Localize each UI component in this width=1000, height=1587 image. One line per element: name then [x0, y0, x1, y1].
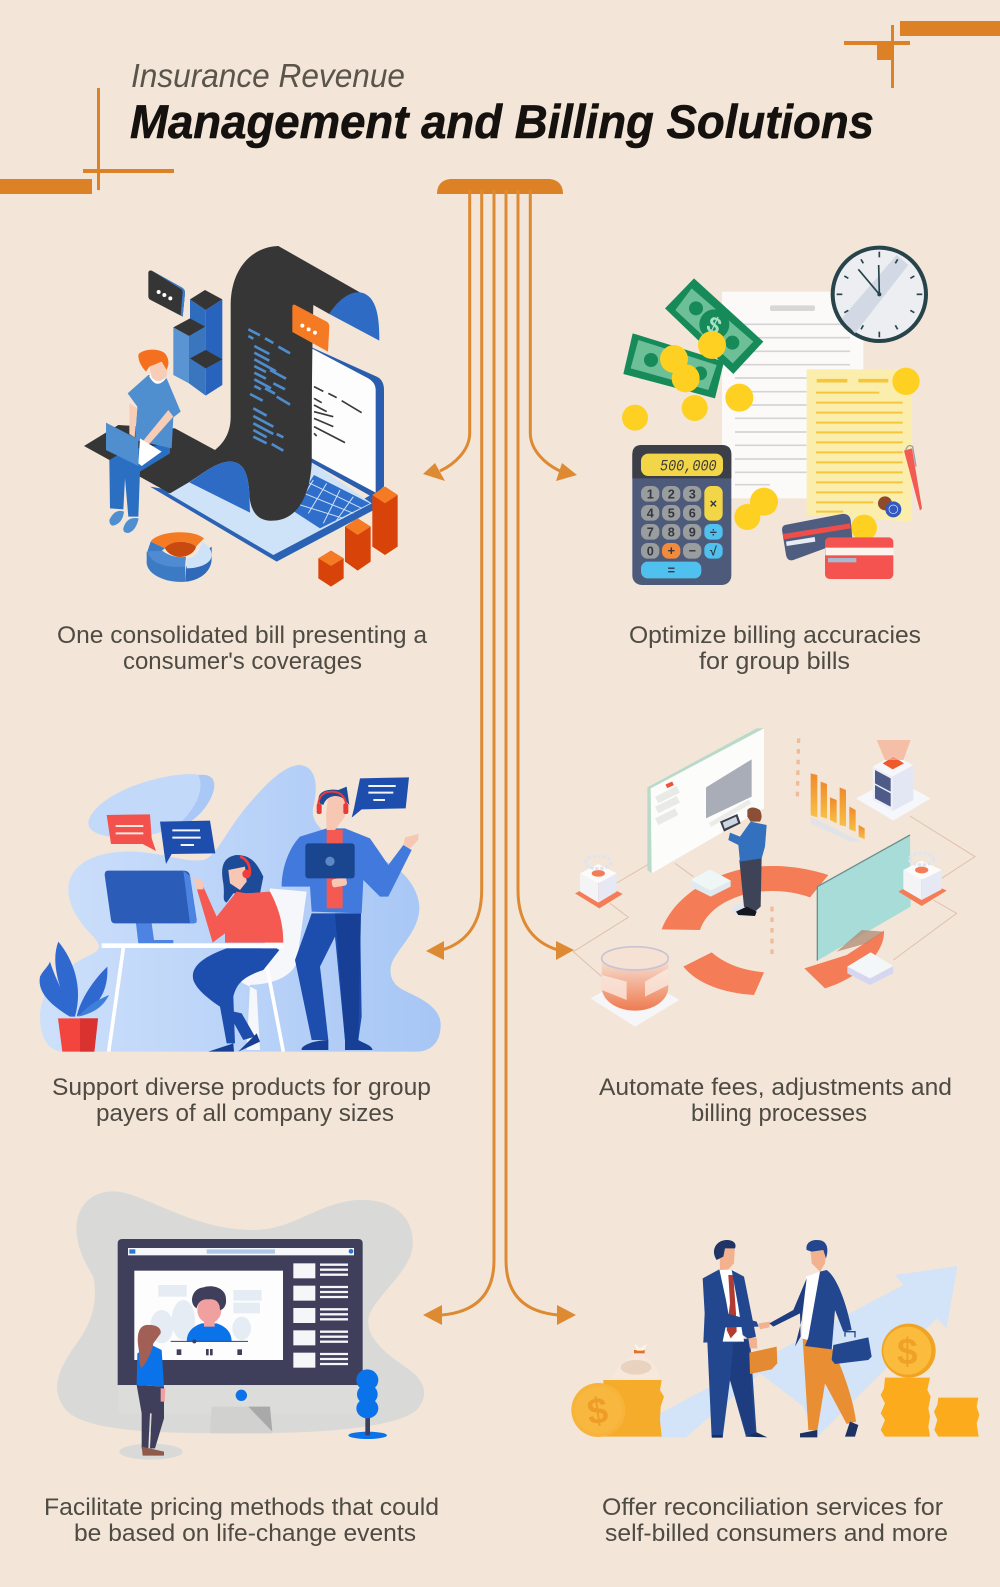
calculator display: 500,000	[660, 458, 717, 476]
caption: pricing methods	[44, 1494, 439, 1547]
woman viewer	[119, 1325, 183, 1460]
icon: orange chat bubble	[292, 305, 329, 352]
calculator keys: ÷	[710, 526, 717, 540]
caption: diverse products	[52, 1074, 431, 1127]
panel: reconciliation handshake illustration	[571, 1240, 979, 1438]
caption: automation	[599, 1074, 952, 1127]
caption: reconciliation: self-billed consumers and more	[605, 1520, 948, 1547]
icon: code printout	[84, 246, 379, 521]
subtitle: Insurance Revenue	[131, 57, 405, 94]
icon: blue blocks	[173, 290, 222, 396]
calculator keys	[641, 486, 723, 578]
coin stack with bag	[571, 1343, 664, 1437]
teal board	[817, 835, 911, 961]
decorative floating digits	[772, 738, 799, 960]
caption: reconciliation: Offer reconciliation services for	[602, 1494, 943, 1521]
glass cylinder on base	[591, 947, 679, 1027]
icon: yellow document	[807, 369, 912, 522]
person with laptop	[106, 350, 181, 533]
caption: pricing methods: Facilitate pricing methods that could	[44, 1494, 439, 1521]
calculator keys: 9	[689, 526, 696, 540]
caption: billing accuracy: Optimize billing accuracies	[629, 622, 921, 649]
businessman right	[769, 1240, 872, 1437]
top-right corner ornament	[844, 21, 1000, 88]
calculator keys: 1	[647, 488, 654, 502]
coin stack with bag: $	[585, 1389, 610, 1433]
isometric gear stack right	[898, 853, 947, 906]
icon: pen	[904, 446, 922, 511]
icon: coins	[622, 331, 920, 541]
icon: laptop	[150, 347, 384, 562]
calculator keys: =	[668, 564, 675, 578]
coin stacks right	[881, 1324, 979, 1437]
isometric routers	[691, 869, 893, 985]
man with tablet	[720, 807, 767, 917]
calculator keys: 0	[647, 545, 654, 559]
woman with headset	[193, 855, 283, 1052]
caption: diverse products: payers of all company sizes	[96, 1100, 394, 1127]
blue background blob	[40, 765, 441, 1052]
caption: consolidated bill: One consolidated bill presenting a	[57, 622, 427, 649]
panel: billing accuracy illustration	[622, 248, 926, 585]
calculator keys: +	[668, 544, 675, 558]
caption: billing accuracy: for group bills	[699, 648, 850, 675]
video player	[150, 1285, 262, 1355]
calculator keys: 7	[647, 526, 654, 540]
caption: automation: Automate fees, adjustments and	[599, 1074, 952, 1101]
caption: consolidated bill: consumer's coverages	[123, 648, 362, 675]
calculator keys: √	[710, 545, 717, 559]
caption: diverse products: Support diverse products for group	[52, 1074, 431, 1101]
connector network lines	[573, 816, 975, 977]
caption: automation: billing processes	[691, 1100, 867, 1127]
panel: video learning illustration	[57, 1191, 424, 1460]
isometric gear stack left	[575, 856, 623, 908]
icon: white invoice	[722, 292, 863, 498]
panel: support team illustration	[40, 765, 441, 1052]
connector cap	[437, 179, 563, 194]
calculator keys: −	[689, 544, 696, 558]
icon: tree	[348, 1369, 387, 1439]
grey blob	[57, 1191, 424, 1433]
calculator keys: 3	[689, 488, 696, 502]
icon: desktop monitor	[118, 1239, 363, 1433]
isometric server	[856, 740, 931, 821]
central connector with six arrows	[423, 179, 577, 1325]
caption: reconciliation	[602, 1494, 948, 1547]
icon: credit cards	[782, 514, 894, 579]
icon: orange bars	[318, 487, 398, 587]
main heading: Management and Billing Solutions	[130, 95, 874, 148]
calculator keys: 5	[668, 507, 675, 521]
bottom-left title ornament	[0, 88, 174, 194]
icon: donut chart	[147, 532, 212, 582]
caption: consolidated bill	[57, 622, 427, 675]
calculator keys: ×	[710, 497, 717, 511]
man with laptop	[282, 787, 418, 1050]
title	[130, 57, 874, 148]
icon: dark chat bubble	[148, 271, 185, 317]
playlist thumbnails	[293, 1263, 348, 1368]
panel: automation illustration	[573, 728, 975, 1027]
caption: pricing methods: be based on life-change events	[74, 1520, 416, 1547]
icon: stamp	[878, 496, 901, 517]
caption: billing accuracy	[629, 622, 921, 675]
growth arrow	[660, 1266, 957, 1437]
orange ring segments	[662, 866, 884, 995]
icon: monitor	[105, 871, 197, 943]
icon: potted plant	[40, 942, 109, 1052]
calculator keys: 8	[668, 526, 675, 540]
calculator keys: 4	[647, 507, 654, 521]
icon: banknotes	[623, 278, 763, 398]
connector lines	[440, 190, 560, 1315]
panel: consolidated bill illustration	[84, 246, 398, 587]
arrowheads	[423, 463, 577, 1325]
businessman left	[703, 1240, 777, 1438]
calculator keys: 6	[689, 507, 696, 521]
icon: wall clock	[833, 248, 926, 341]
chair and desk	[102, 888, 307, 1052]
screen with dashboard	[647, 728, 764, 873]
icon: banknotes: $	[703, 311, 726, 340]
calculator keys: 2	[668, 488, 675, 502]
bar chart	[811, 773, 865, 842]
chat bubbles	[107, 777, 409, 864]
icon: calculator	[632, 445, 731, 585]
coin stacks right: $	[897, 1331, 918, 1372]
